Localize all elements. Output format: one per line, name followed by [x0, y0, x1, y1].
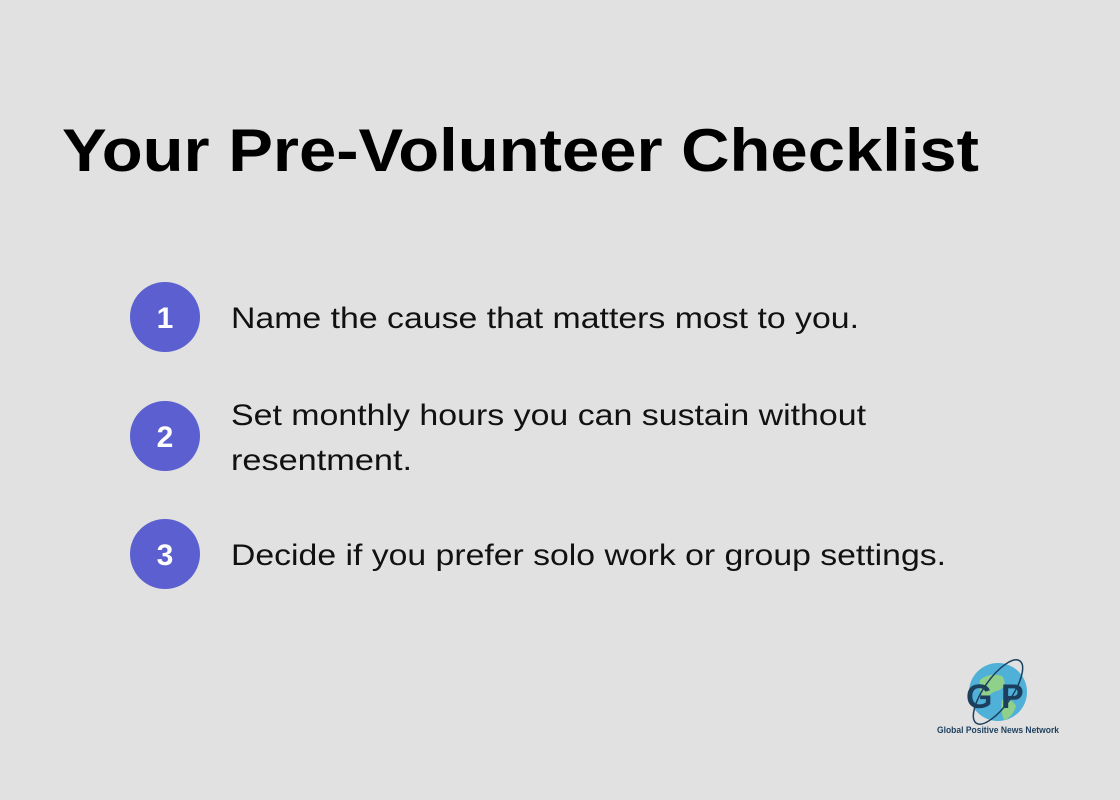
item 3	[130, 519, 946, 589]
item 2: Set monthly hours you can sustain without	[231, 399, 867, 432]
title: Your Pre-Volunteer Checklist	[62, 117, 979, 184]
item 3: 3	[157, 539, 173, 572]
item 1	[130, 282, 859, 352]
item 3: Decide if you prefer solo work or group settings.	[231, 539, 946, 572]
logo	[937, 653, 1060, 736]
logo: G	[966, 678, 992, 716]
item 2: 2	[157, 421, 173, 454]
logo: P	[1001, 678, 1024, 716]
item 2	[130, 399, 867, 477]
item 1: Name the cause that matters most to you.	[231, 302, 859, 335]
item 2: resentment.	[231, 444, 412, 477]
logo: Global Positive News Network	[937, 725, 1060, 736]
item 1: 1	[157, 302, 173, 335]
